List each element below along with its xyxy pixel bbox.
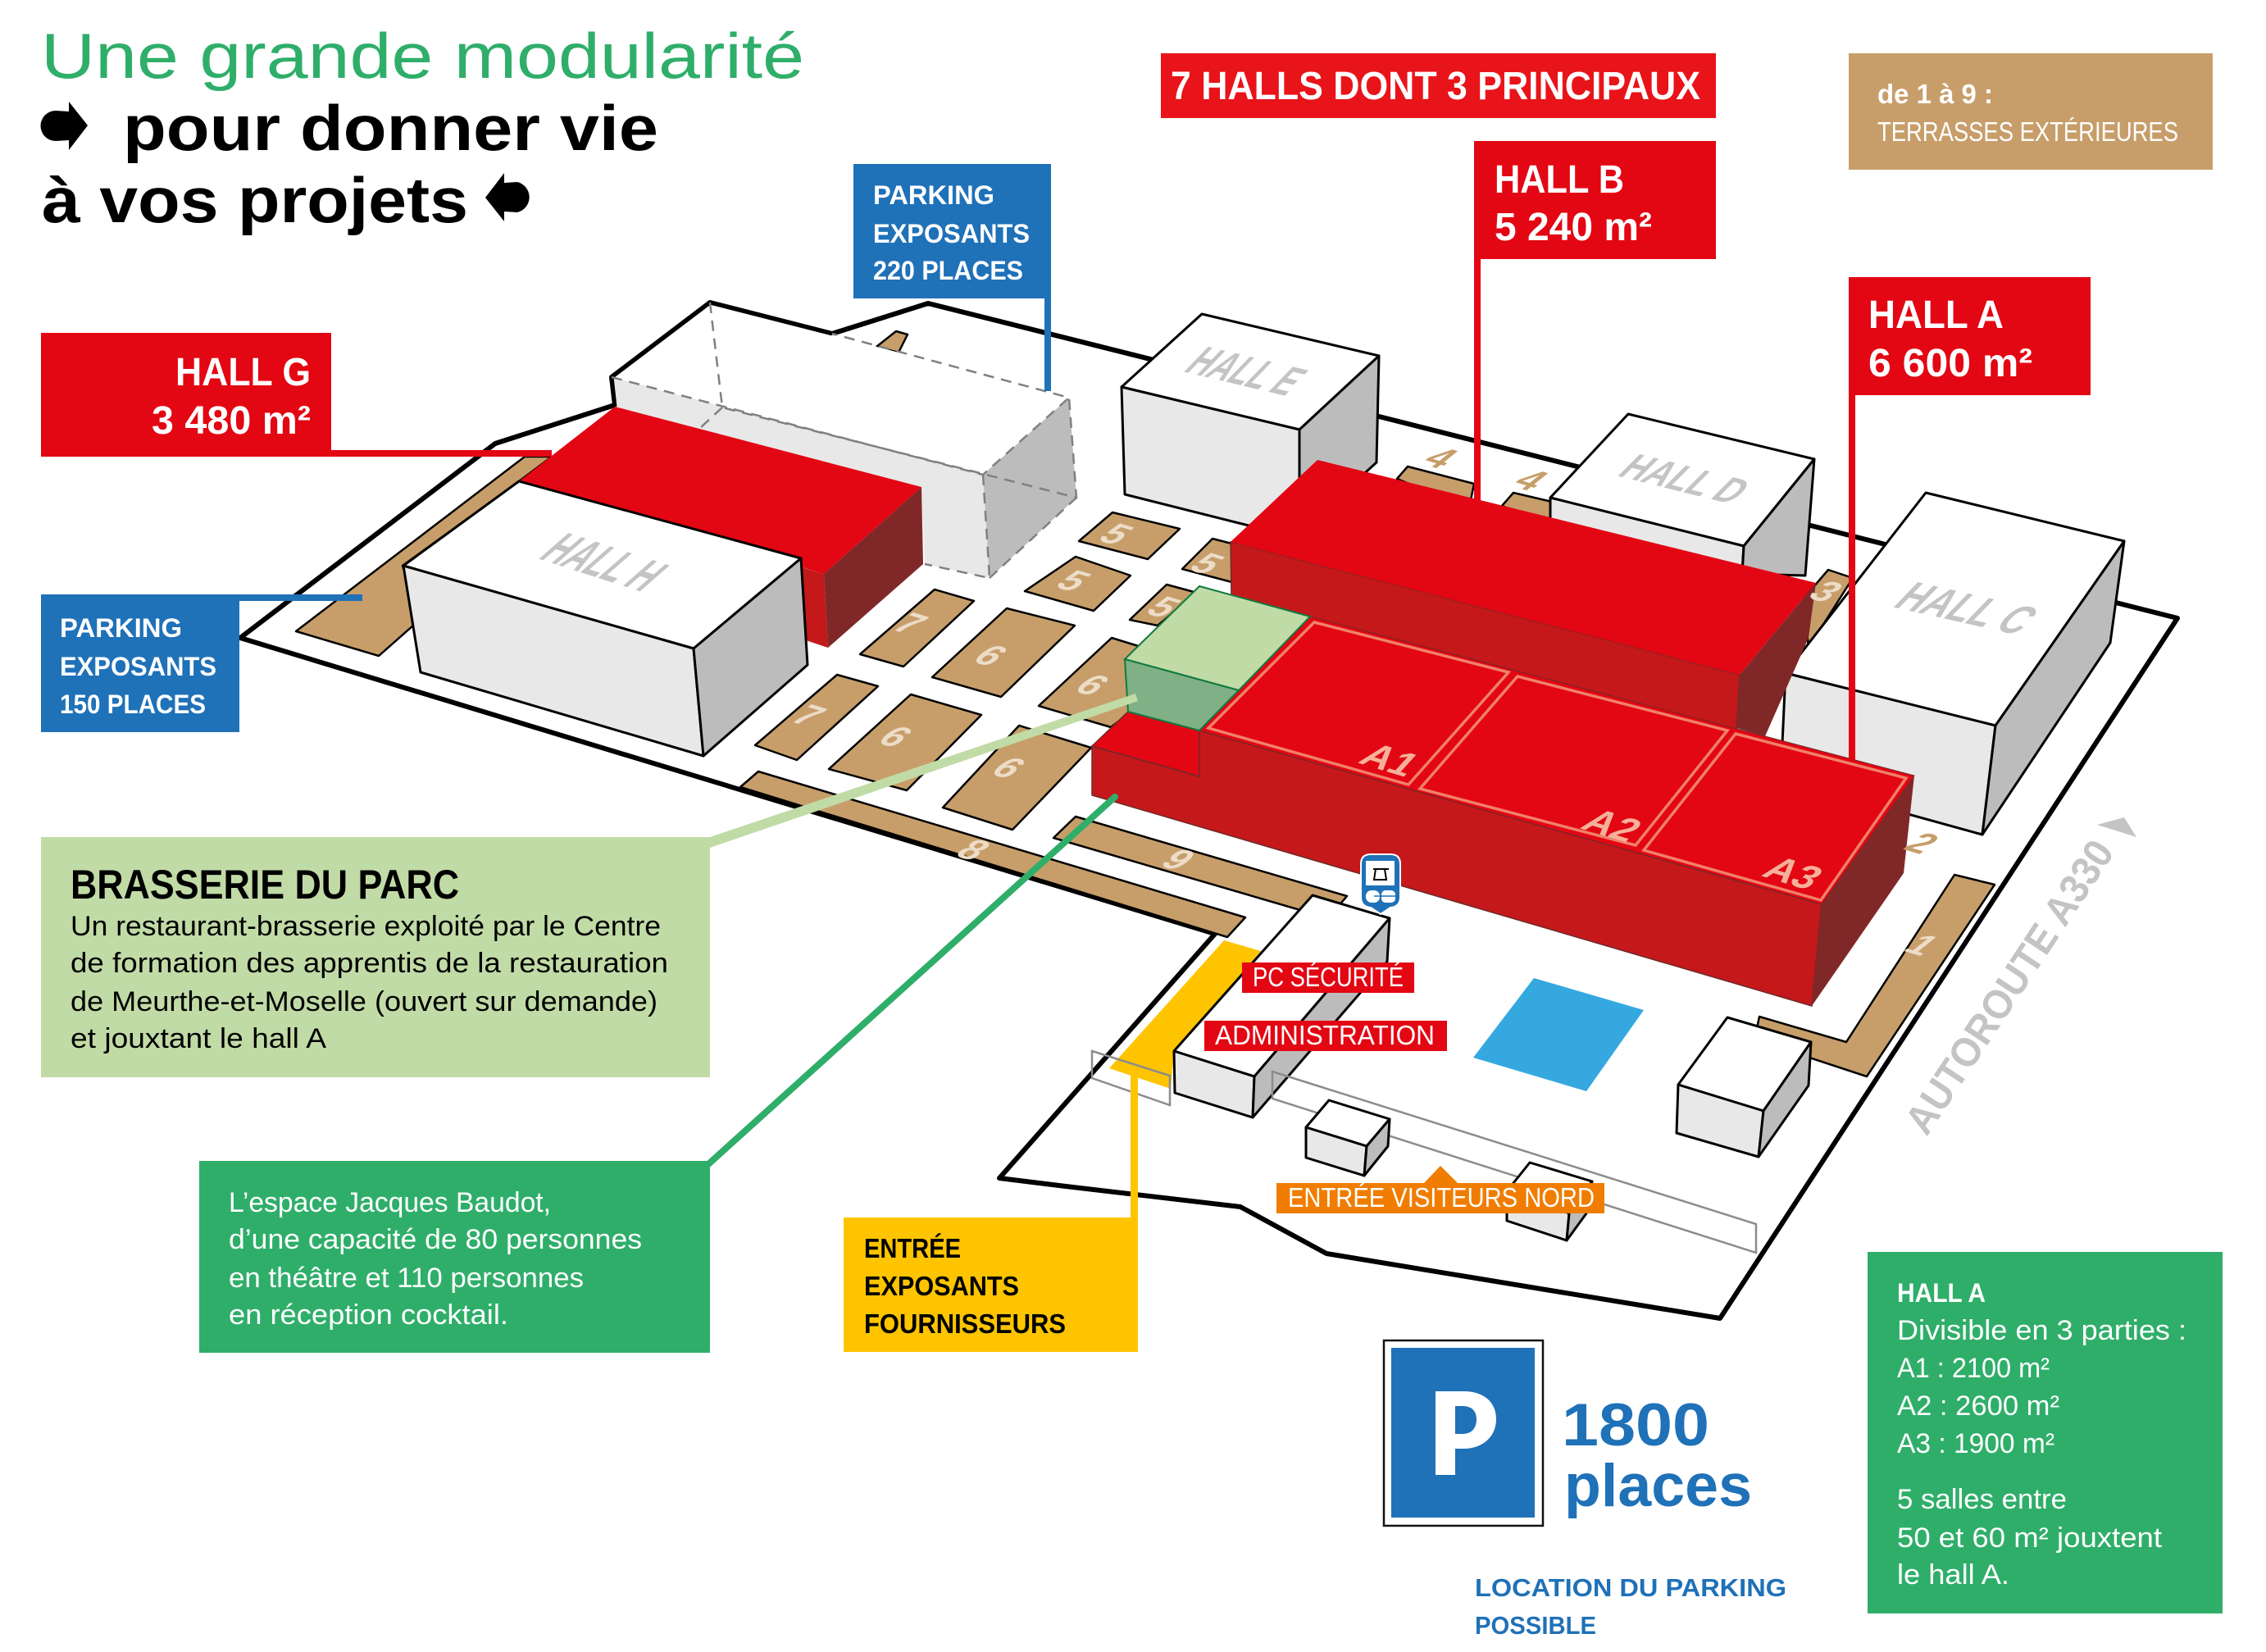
text block: brasserie description: et jouxtant le hall A [71,1023,326,1054]
panel: espace Jacques Baudot [199,1161,710,1353]
small building middle [1306,1100,1390,1176]
callout: hall G: 3 480 m² [152,399,311,443]
text: location du parking possible: LOCATION DU PARKING [1475,1573,1786,1602]
panel: hall A details: A2 : 2600 m² [1897,1390,2059,1422]
terrace 7 a [860,589,974,667]
title line 1: Une grande modularité [41,20,804,92]
callout: parking exposants 220 places [853,164,1051,391]
small building under entrance [1507,1163,1592,1240]
terrace 4 b [1502,493,1552,525]
panel: hall A details: 5 salles entre [1897,1484,2067,1515]
terrace 6 d [943,726,1091,830]
terrace 5 a [1079,512,1180,559]
site labels [1204,962,1604,1213]
callout: hall B: HALL B [1495,158,1624,202]
terrace numbers: 6 [869,720,923,753]
callout: parking exposants 150 places: PARKING [60,613,182,643]
legend: terraces: de 1 à 9 : [1877,79,1993,109]
parking capacity figure: 1800 [1562,1392,1709,1459]
icon: parking sign [1384,1340,1543,1526]
callout: hall B [1474,141,1716,502]
terrace 9 [1053,817,1347,918]
text block: brasserie description: de formation des apprentis de la restauration [71,948,668,979]
hall G red building [519,407,923,648]
label A1: A1 [1351,737,1428,784]
parking capacity figure [1562,1392,1752,1519]
terrace numbers: 7 [782,699,836,732]
text block: brasserie description: de Meurthe-et-Moselle (ouvert sur demande) [71,986,658,1017]
panel: hall A details: A1 : 2100 m² [1897,1353,2050,1384]
label: PC sécurité: PC SÉCURITÉ [1253,962,1404,992]
label: hall D: HALL D [1608,448,1759,512]
road label: autoroute A330: AUTOROUTE A330 [1895,831,2123,1142]
hall C building [1781,493,2124,835]
partition A2 [1420,676,1727,845]
callout: hall A: 6 600 m² [1868,342,2032,385]
label: hall C: HALL C [1883,575,2049,643]
partition A3 [1644,734,1906,900]
terrace 1 [1754,875,1995,1076]
icon: arrow left [485,173,530,221]
terrace numbers: 4 [1414,441,1468,475]
callout: hall A [1849,277,2091,760]
panel: hall A details: HALL A [1897,1278,1986,1308]
terrace numbers: 6 [964,639,1018,672]
small building right [1677,1017,1811,1157]
hall H building [403,481,808,756]
callout: hall G: HALL G [175,351,311,394]
legend: terraces: TERRASSES EXTÉRIEURES [1877,116,2178,147]
terrace 8 [740,771,1245,937]
callout: parking exposants 220 places: PARKING [873,180,994,210]
terrace numbers: 6 [982,751,1036,785]
terrace 5 b [1025,557,1131,611]
heading: brasserie: BRASSERIE DU PARC [71,862,459,908]
parking capacity figure: places [1564,1453,1752,1519]
terrace numbers: 7 [884,607,938,640]
panel: entrée exposants fournisseurs [844,1074,1138,1352]
callout: hall B: 5 240 m² [1495,206,1652,249]
callout: hall A: HALL A [1868,294,2004,337]
label: entrée visiteurs nord: ENTRÉE VISITEURS NORD [1288,1182,1595,1213]
text: location du parking possible [1475,1573,1786,1640]
terrace 4 a [1397,466,1474,508]
panel: espace Jacques Baudot: en réception cocktail. [229,1299,508,1331]
text: location du parking possible: POSSIBLE [1475,1611,1596,1640]
exhibitors entrance yellow path [1109,940,1261,1089]
panel: entrée exposants fournisseurs: ENTRÉE [864,1233,961,1263]
grey entrance rectangles [1092,1051,1756,1253]
label: hall E: HALL E [1175,339,1318,404]
panel: hall A details: Divisible en 3 parties : [1897,1315,2186,1346]
administration building [1174,895,1390,1117]
panel: espace Jacques Baudot: d’une capacité de 80 personnes [229,1224,642,1255]
panel: espace Jacques Baudot: L’espace Jacques Baudot, [229,1187,551,1218]
callout: parking exposants 150 places: EXPOSANTS [60,652,216,681]
terrace numbers: 2 [1895,826,1950,860]
hall D building [1550,414,1814,576]
hall B red building [1231,460,1816,736]
heading banner: 7 halls: 7 HALLS DONT 3 PRINCIPAUX [1171,65,1700,108]
callout: hall G [41,333,552,457]
hall A red building [1092,617,1914,1006]
terrace numbers: 1 [1895,928,1950,962]
terrace numbers [782,441,1950,962]
terrace 6 a [932,608,1075,697]
terrace: top small [876,331,908,353]
panel: hall A details: 50 et 60 m² jouxtent [1897,1522,2163,1554]
hall E building [1122,314,1379,533]
callout: parking exposants 150 places [41,594,362,732]
panel: entrée exposants fournisseurs: EXPOSANTS [864,1271,1019,1301]
terrace numbers: 6 [1066,668,1120,702]
text block: brasserie description: Un restaurant-brasserie exploité par le Centre [71,911,661,942]
terrace numbers: 5 [1181,547,1235,580]
terrace numbers: 8 [947,833,1001,867]
brasserie green building [1125,586,1310,730]
blue square pool [1473,978,1644,1091]
terrace 7 b [755,675,878,760]
terrace 5 d [1182,539,1238,584]
callout: parking exposants 220 places: EXPOSANTS [873,219,1030,248]
terrace 6 c [829,694,981,790]
panel: entrée exposants fournisseurs: FOURNISSEURS [864,1308,1066,1339]
title line 2: pour donner vie [123,92,658,164]
callout: parking exposants 150 places: 150 PLACES [60,689,206,719]
label A3: A3 [1754,850,1831,897]
callout: parking exposants 220 places: 220 PLACES [873,256,1023,285]
terrace numbers: 5 [1047,564,1101,598]
title [41,20,804,236]
label: hall H: HALL H [528,524,681,600]
text block: brasserie description [71,911,668,1054]
terrace 5 c [1130,585,1197,626]
terrace numbers: 5 [1137,590,1191,624]
leader: brasserie [710,694,1138,848]
panel: hall A details [1868,1252,2223,1613]
panel: brasserie du parc [41,837,710,1077]
legend: terraces [1849,53,2213,170]
label: entrée visiteurs nord [1276,1166,1604,1213]
panel: hall A details: le hall A. [1897,1559,2009,1591]
panel: espace Jacques Baudot: en théâtre et 110 personnes [229,1263,584,1294]
hall F ghost dashed building [612,303,1076,578]
terrace numbers: 5 [1090,517,1144,551]
heading banner: 7 halls [1161,53,1716,118]
label: administration: ADMINISTRATION [1215,1020,1435,1050]
panel: hall A details: A3 : 1900 m² [1897,1428,2054,1459]
terrace 3 [1804,570,1853,648]
terrace numbers: 4 [1504,463,1558,497]
terrace: left parking [296,457,552,656]
terrace numbers: 3 [1800,575,1854,608]
partition A1 [1208,622,1508,785]
terrace numbers: 9 [1152,843,1206,876]
icon: arrow right [41,102,88,150]
terraces [296,331,1995,1076]
icon: cash machine CB [1361,854,1400,914]
terrace 6 b [1039,638,1144,727]
leader: espace Jacques Baudot [708,797,1115,1164]
title line 3: à vos projets [42,164,468,236]
site ground outline [240,303,2177,1318]
label A2: A2 [1573,803,1650,849]
